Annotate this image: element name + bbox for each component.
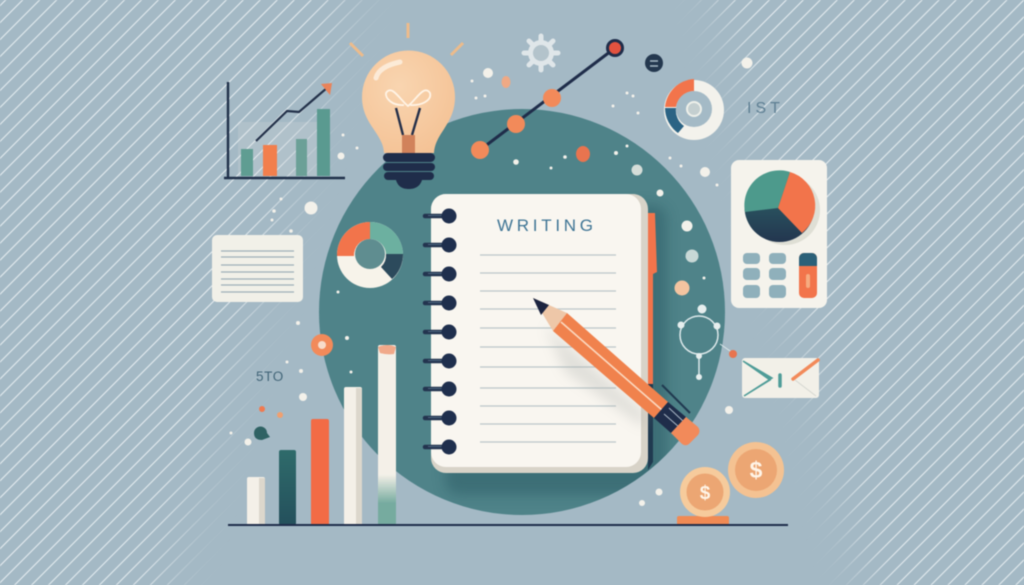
teal circle bbox=[319, 109, 725, 515]
donut chart on circle bbox=[337, 222, 403, 288]
network icon bbox=[678, 304, 720, 380]
line chart with bars bbox=[224, 82, 345, 179]
text card left bbox=[212, 235, 303, 302]
heading: WRITING: WRITING bbox=[497, 216, 593, 235]
coins: $ bbox=[700, 483, 711, 504]
light bulb bbox=[350, 23, 463, 189]
spiral rings bbox=[425, 208, 456, 454]
orange dots bbox=[259, 76, 690, 418]
label: IST: IST bbox=[747, 100, 784, 117]
envelope bbox=[742, 358, 819, 398]
label: 5TO: 5TO bbox=[256, 369, 284, 384]
target icon bbox=[311, 334, 333, 356]
coins: $ bbox=[750, 457, 763, 483]
notebook bbox=[425, 194, 657, 473]
dark blob icon bbox=[254, 426, 270, 440]
bar chart bottom left bbox=[228, 345, 788, 526]
donut chart top right bbox=[664, 79, 724, 140]
coins bbox=[677, 442, 784, 525]
small dark badge bbox=[645, 54, 663, 72]
floating dots bbox=[230, 58, 752, 506]
small connector dot bbox=[720, 344, 737, 358]
calculator card bbox=[731, 160, 827, 308]
trend line with dots bbox=[471, 40, 622, 159]
ruled lines bbox=[480, 255, 616, 442]
pencil bbox=[533, 298, 700, 445]
gear icon bbox=[524, 36, 558, 70]
